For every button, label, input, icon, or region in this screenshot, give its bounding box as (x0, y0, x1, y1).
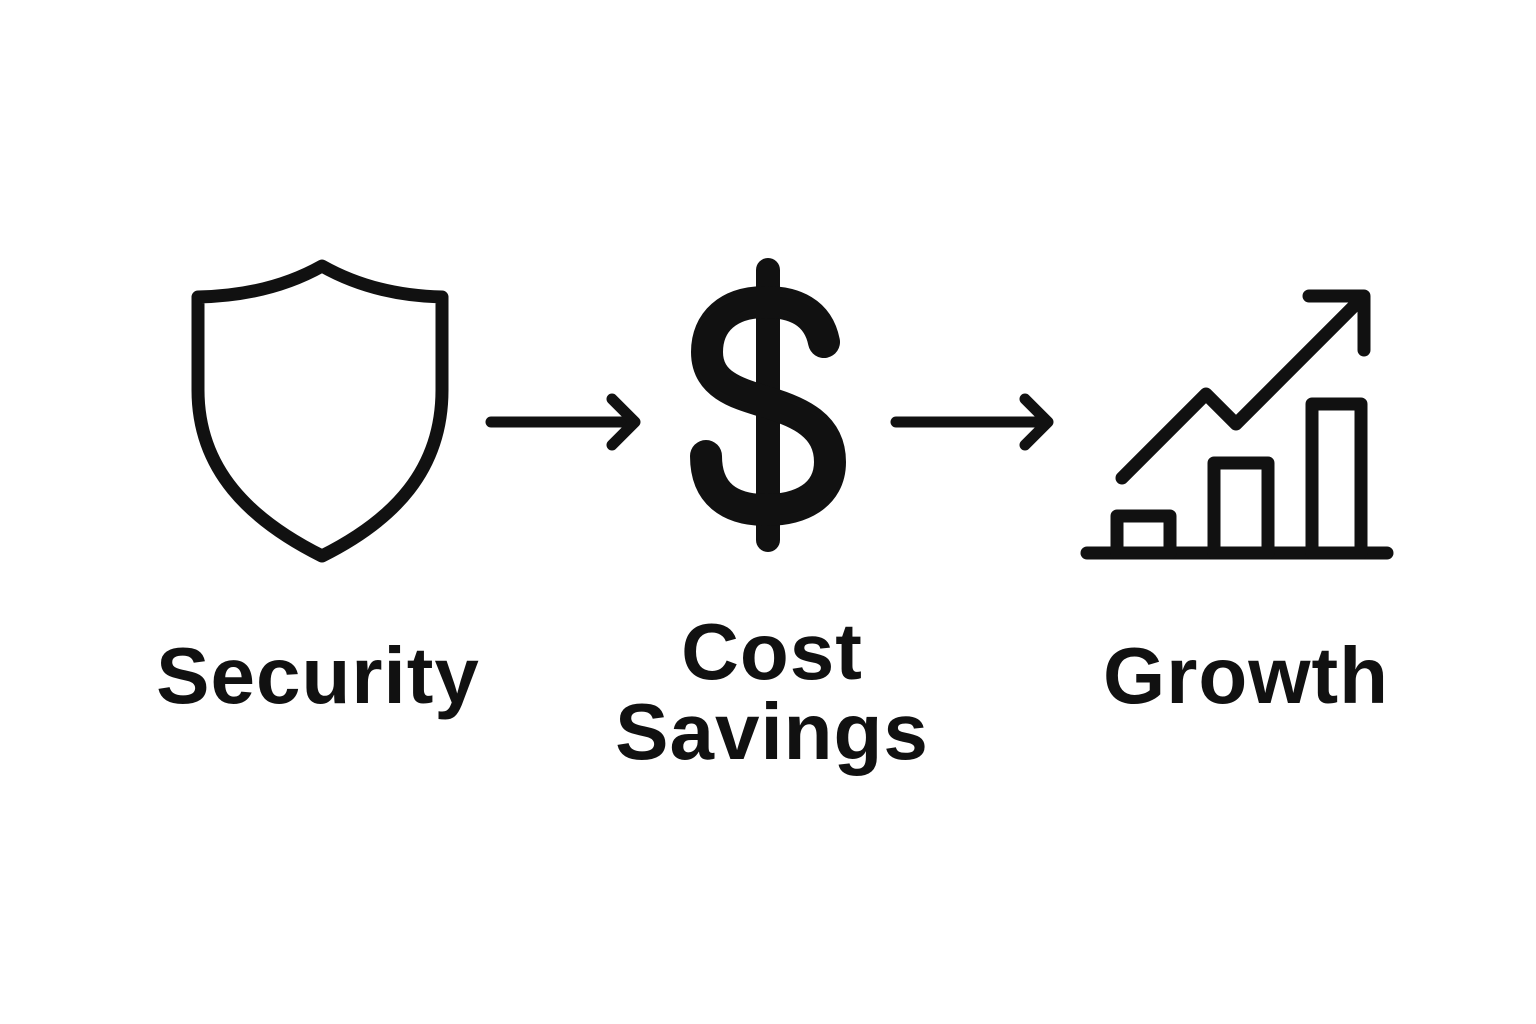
label: Security: Security (156, 631, 480, 720)
label: Growth: Growth (1103, 631, 1389, 720)
arrow: security to cost savings (491, 399, 635, 445)
icon: growth chart (1087, 296, 1387, 553)
label: Cost Savings (615, 607, 929, 776)
icon: shield (198, 266, 442, 556)
icon: dollar sign (706, 270, 830, 540)
label: Cost Savings: Cost (681, 607, 863, 696)
arrow: cost savings to growth (896, 399, 1048, 445)
label: Cost Savings: Savings (615, 687, 929, 776)
